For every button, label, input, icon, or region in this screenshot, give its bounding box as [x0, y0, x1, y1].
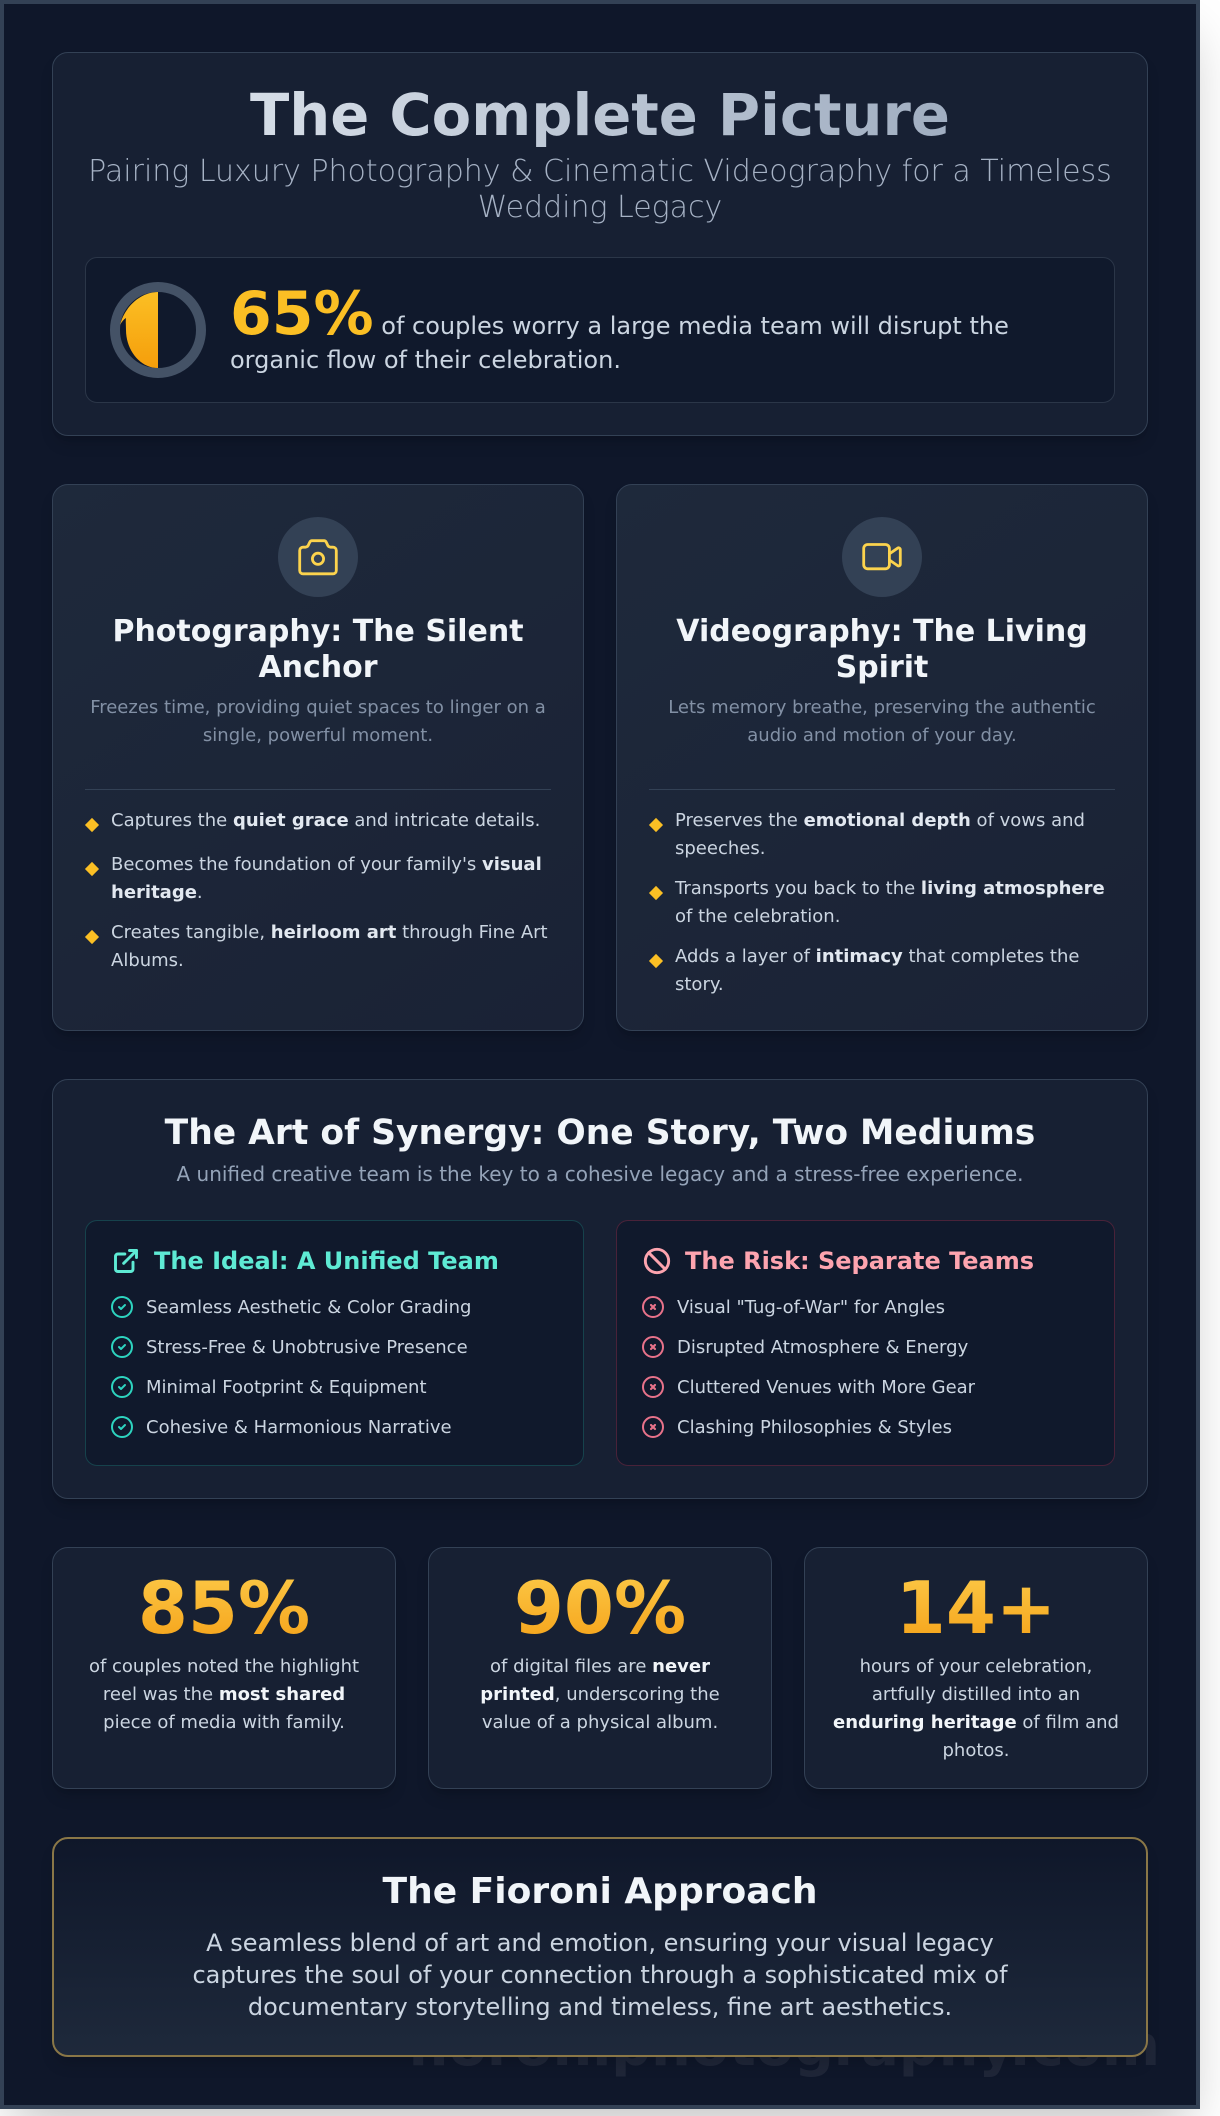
benefit list: heritage.: [111, 882, 203, 903]
risk list: Cluttered Venues with More Gear: [677, 1377, 975, 1398]
panel: photography: [52, 484, 584, 1031]
benefit list: [85, 789, 551, 974]
benefit list: Becomes the foundation of your family's visual: [111, 854, 542, 875]
heading with ban icon: The Risk: Separate Teams: [685, 1247, 1034, 1275]
caption: enduring heritage of film and: [833, 1712, 1119, 1733]
checklist: Cohesive & Harmonious Narrative: [146, 1417, 452, 1438]
benefit list: Adds a layer of intimacy that completes the: [675, 946, 1079, 967]
benefit list: Transports you back to the living atmosphere: [675, 878, 1105, 899]
number: [453, 1572, 747, 1644]
panel: 90 percent: [428, 1547, 772, 1789]
comparison boxes: [85, 1220, 1115, 1466]
heading: The Art of Synergy: One Story, Two Mediums: [165, 1113, 1035, 1153]
description: Lets memory breathe, preserving the authentic: [668, 697, 1096, 718]
title: The Complete Picture: [250, 82, 950, 149]
risk list: [642, 1296, 975, 1438]
risk list: Clashing Philosophies & Styles: [677, 1417, 952, 1438]
number: 14+: [896, 1566, 1056, 1650]
description: audio and motion of your day.: [747, 725, 1017, 746]
description: single, powerful moment.: [203, 725, 433, 746]
description: [90, 697, 546, 746]
statistics row: [52, 1547, 1148, 1789]
number: 85%: [138, 1566, 310, 1650]
heading: [676, 614, 1088, 685]
callout: 65 percent statistic: [85, 257, 1115, 403]
benefit list: [649, 789, 1115, 998]
panel: header: [52, 52, 1148, 436]
benefit list: Preserves the emotional depth of vows and: [675, 810, 1085, 831]
lead text: A unified creative team is the key to a cohesive legacy and a stress-free experience.: [176, 1162, 1024, 1186]
closing text: captures the soul of your connection through a sophisticated mix of: [192, 1961, 1008, 1989]
panel: the risk: [616, 1220, 1115, 1466]
closing text: [192, 1929, 1008, 2021]
panel: 14 plus hours: [804, 1547, 1148, 1789]
risk list: Disrupted Atmosphere & Energy: [677, 1337, 968, 1358]
description: [668, 697, 1096, 746]
caption: of couples noted the highlight: [89, 1656, 359, 1677]
heading: [112, 614, 524, 685]
caption: photos.: [942, 1740, 1010, 1761]
benefit list: speeches.: [675, 838, 765, 859]
icon: half filled circle: [110, 282, 206, 378]
caption: of digital files are never: [490, 1656, 710, 1677]
statistic text: organic flow of their celebration.: [230, 346, 621, 374]
subtitle: Wedding Legacy: [478, 190, 722, 225]
benefit list: of the celebration.: [675, 906, 840, 927]
subtitle: [88, 154, 1112, 225]
number: 90%: [514, 1566, 686, 1650]
closing text: documentary storytelling and timeless, fine art aesthetics.: [248, 1993, 952, 2021]
number: [829, 1572, 1123, 1644]
caption: [833, 1656, 1119, 1761]
panel: the Fioroni approach: [52, 1837, 1148, 2057]
panel: synergy: [52, 1079, 1148, 1499]
caption: [480, 1656, 720, 1733]
heading with external link icon: The Ideal: A Unified Team: [154, 1247, 499, 1275]
checklist: [111, 1296, 471, 1438]
icon: camera: [278, 517, 358, 597]
benefit list: story.: [675, 974, 724, 995]
heading: Spirit: [836, 650, 928, 685]
two column comparison: [52, 484, 1148, 1031]
description: Freezes time, providing quiet spaces to linger on a: [90, 697, 546, 718]
caption: hours of your celebration,: [860, 1656, 1092, 1677]
risk list: Visual "Tug-of-War" for Angles: [677, 1297, 945, 1318]
caption: artfully distilled into an: [872, 1684, 1080, 1705]
benefit list: Albums.: [111, 950, 184, 971]
title: [85, 84, 1115, 148]
heading: Videography: The Living: [676, 614, 1088, 649]
icon: video camera: [842, 517, 922, 597]
number: [77, 1572, 371, 1644]
caption: value of a physical album.: [482, 1712, 718, 1733]
checklist: Stress-Free & Unobtrusive Presence: [146, 1337, 468, 1358]
heading: The Fioroni Approach: [383, 1871, 817, 1912]
benefit list: Captures the quiet grace and intricate details.: [111, 810, 540, 831]
panel: videography: [616, 484, 1148, 1031]
caption: piece of media with family.: [103, 1712, 345, 1733]
heading: Photography: The Silent: [112, 614, 524, 649]
caption: reel was the most shared: [103, 1684, 345, 1705]
caption: [89, 1656, 359, 1733]
panel: 85 percent: [52, 1547, 396, 1789]
checklist: Minimal Footprint & Equipment: [146, 1377, 427, 1398]
closing text: A seamless blend of art and emotion, ensuring your visual legacy: [206, 1929, 994, 1957]
heading: Anchor: [258, 650, 378, 685]
panel: the ideal: [85, 1220, 584, 1466]
statistic text: 65% of couples worry a large media team will disrupt the: [230, 279, 1009, 349]
checklist: Seamless Aesthetic & Color Grading: [146, 1297, 471, 1318]
benefit list: Creates tangible, heirloom art through Fine Art: [111, 922, 548, 943]
watermark: fioroniphotography.com: [407, 2014, 1160, 2079]
caption: printed, underscoring the: [480, 1684, 720, 1705]
subtitle: Pairing Luxury Photography & Cinematic Videography for a Timeless: [88, 154, 1112, 189]
